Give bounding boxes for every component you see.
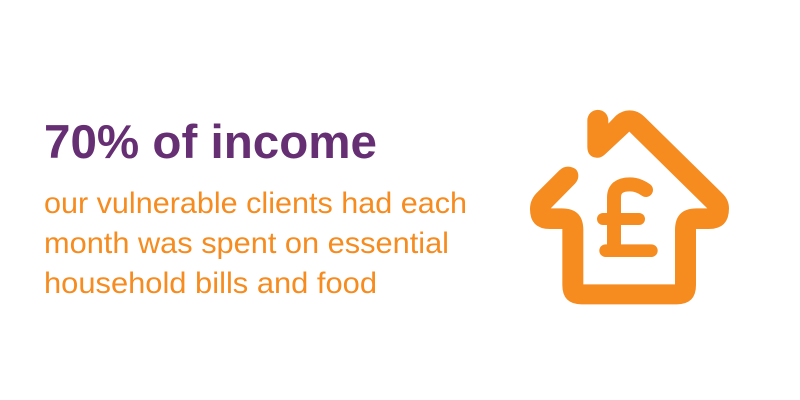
title: 70% of income xyxy=(44,115,377,168)
icon: house outline xyxy=(530,110,729,304)
text block: description xyxy=(44,187,467,300)
text block: description: household bills and food xyxy=(44,267,377,300)
icon: house with pound sign xyxy=(530,110,729,304)
text block: description: our vulnerable clients had each xyxy=(44,187,467,220)
text block: description: month was spent on essential xyxy=(44,227,449,260)
icon: pound sign xyxy=(603,184,651,251)
